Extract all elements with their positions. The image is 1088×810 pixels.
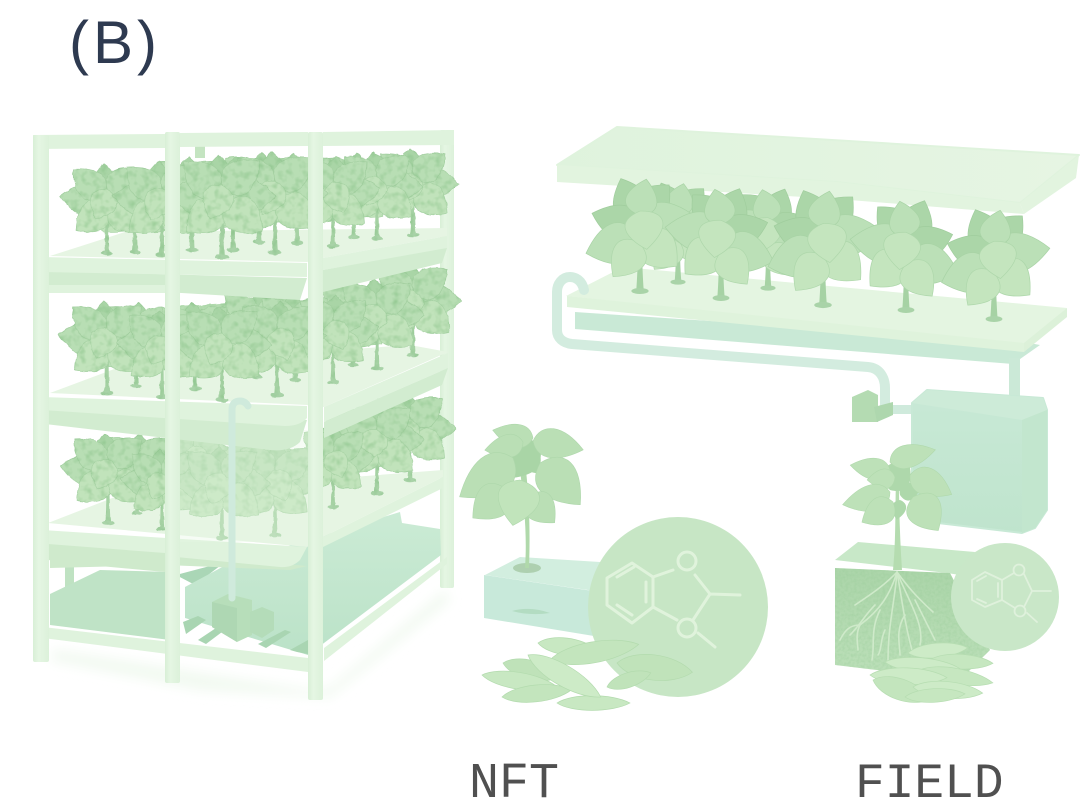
rack nutrient tanks [50, 512, 441, 655]
rack top frame [33, 130, 454, 158]
haze over middle bay of shelf 3 [180, 430, 308, 542]
soil block [835, 542, 990, 680]
NFT soybean pods [481, 634, 694, 710]
plants on shelf 2 [57, 256, 462, 402]
shelf 3 [42, 470, 443, 572]
plants on shelf 1 [58, 142, 459, 260]
field plant [840, 438, 958, 570]
bench plants [579, 172, 1053, 322]
bench reservoir [912, 390, 1047, 533]
grow light panel [557, 127, 1079, 214]
rack floor slats [183, 616, 308, 654]
bench tray [566, 267, 1067, 352]
field molecule structure [972, 564, 1051, 622]
field soybean pods [870, 640, 994, 709]
molecule structure [607, 552, 740, 647]
panel: top-right hydroponic bench [557, 127, 1079, 533]
rack water pump [212, 594, 274, 642]
bench trough [575, 312, 1040, 364]
rack back posts [324, 130, 454, 661]
field molecule circle [951, 543, 1059, 651]
rack front posts [33, 132, 323, 700]
panel label: (B) [69, 9, 161, 76]
shelf 1 [42, 228, 447, 300]
return pipe [557, 277, 885, 408]
rack bottom bar [43, 627, 308, 672]
panel: NFT single unit [449, 420, 768, 710]
roots [840, 572, 935, 660]
panel: vertical hydroponic rack [33, 130, 462, 700]
drain pipe [1009, 358, 1020, 408]
NFT channel block [484, 557, 600, 637]
plants on shelf 3 [59, 387, 456, 540]
shelf 2 [42, 345, 448, 450]
NFT plant [449, 420, 596, 568]
NFT molecule circle [588, 517, 768, 697]
rack floor shadow [50, 590, 450, 697]
panel: field single unit [835, 438, 1059, 709]
bench pump [852, 390, 913, 422]
pump riser pipe [232, 401, 248, 598]
